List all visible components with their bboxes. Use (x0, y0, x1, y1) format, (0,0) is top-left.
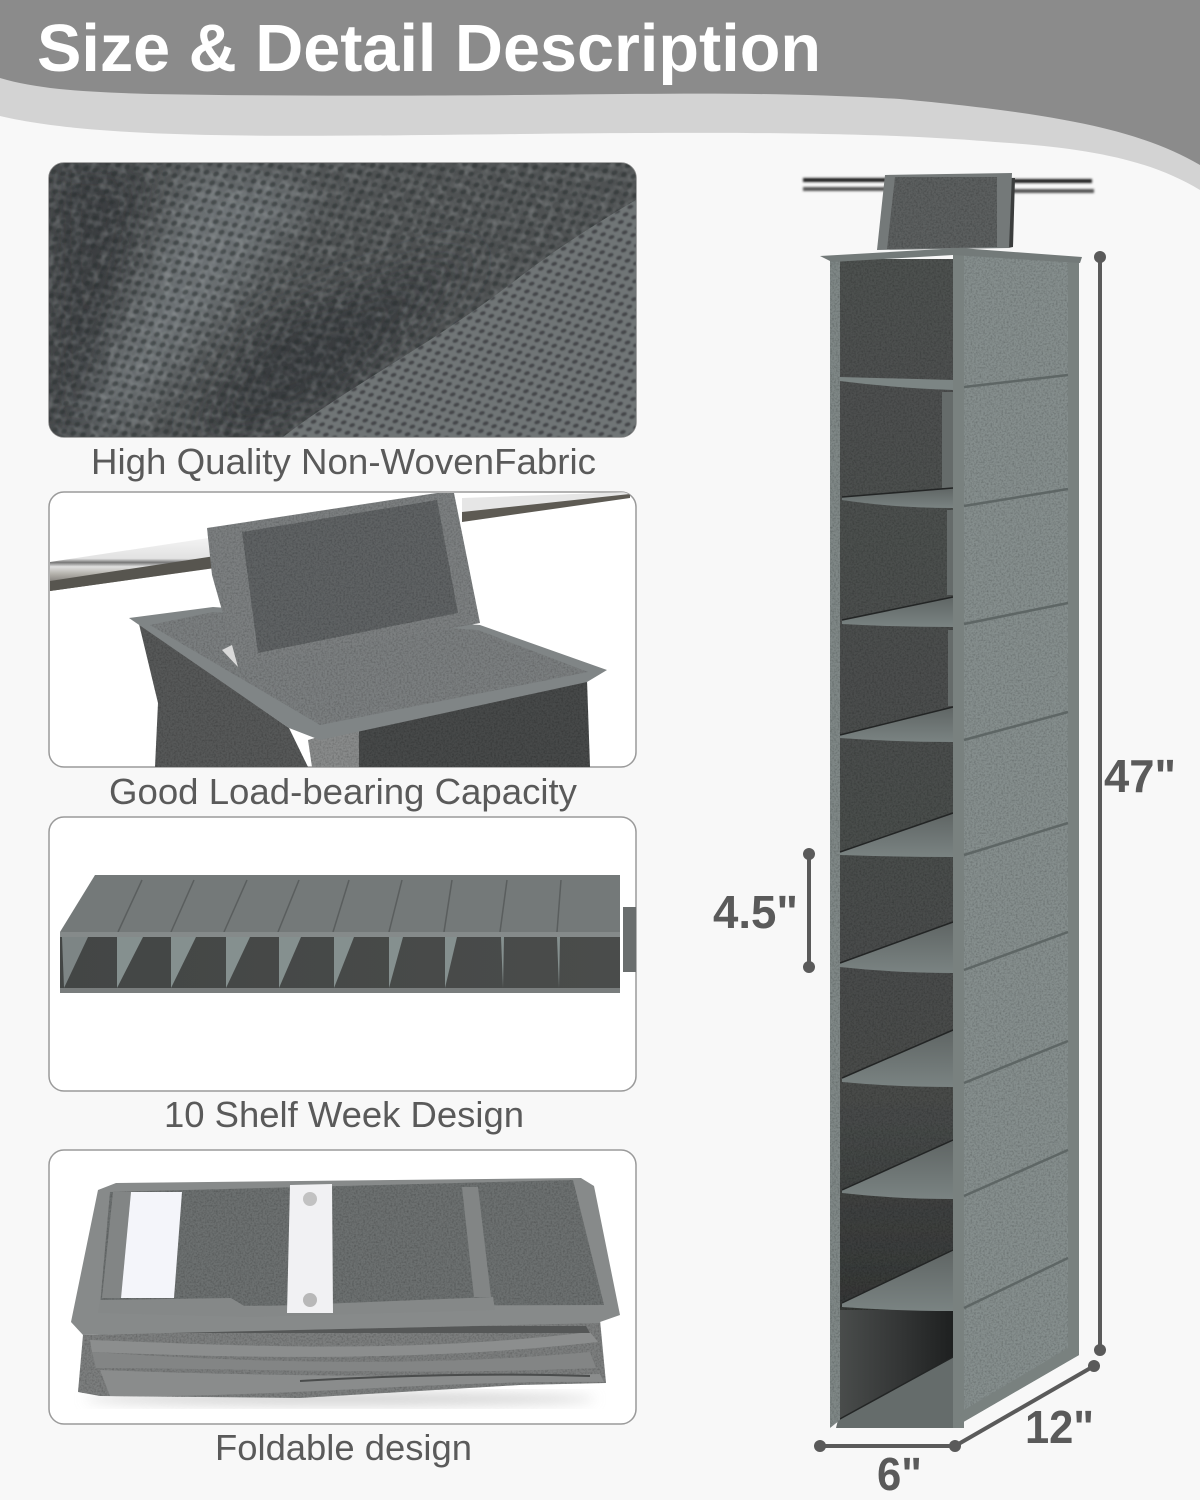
dimension: depth 12: 12" (1025, 1401, 1094, 1453)
top face dividers (118, 880, 561, 932)
caption: foldable: Foldable design (215, 1427, 472, 1468)
top face (60, 875, 620, 932)
icon: white strip with snaps (287, 1184, 333, 1313)
hanger strap (877, 173, 1015, 250)
left front strip (830, 260, 840, 1428)
strap loop (207, 493, 480, 628)
fabric inner (100, 1180, 604, 1306)
header band (0, 0, 1200, 190)
caption: load-bearing: Good Load-bearing Capacity (109, 771, 577, 812)
dimension: shelf height 4.5 (713, 848, 815, 973)
dimension: depth 12 (955, 1360, 1100, 1453)
dimension: height 47: 47" (1104, 750, 1176, 802)
panel: fabric close-up (49, 163, 636, 437)
panel: folded organizer (49, 1150, 636, 1424)
left hanging body (139, 624, 308, 767)
dimension: width 6: 6" (877, 1448, 922, 1500)
shelf back shadow lines (838, 488, 953, 1420)
title: Size & Detail Description (37, 11, 821, 86)
panel: 10 shelf flat view (49, 817, 636, 1091)
ground shadow (85, 1393, 595, 1405)
left strip (102, 1192, 131, 1298)
lit inner edges (942, 392, 953, 706)
dimension: width 6 (814, 1440, 961, 1500)
right hanging body (359, 680, 590, 767)
panel: hanger and load-bearing photo (49, 492, 636, 767)
top face (71, 1178, 620, 1335)
bottom strip (98, 1297, 495, 1317)
middle strip (462, 1187, 491, 1297)
folded layers (78, 1320, 606, 1398)
icon: metal rod (50, 492, 630, 591)
back wall of compartments (840, 259, 953, 1311)
side panel shelf lines (964, 375, 1068, 1308)
dimension: height 47 (1094, 251, 1176, 1356)
side panel stitched strips (953, 254, 1079, 1428)
front opening (60, 932, 620, 993)
dimension: shelf height 4.5: 4.5" (713, 886, 798, 938)
top plate (820, 248, 1082, 263)
shelves (836, 377, 953, 1428)
top plate (129, 607, 607, 740)
side panel (953, 254, 1079, 1428)
bottom compartment wall (838, 1310, 953, 1428)
icon: white label strip (121, 1192, 182, 1298)
hanging rod (803, 180, 1094, 191)
caption: 10 shelf: 10 Shelf Week Design (164, 1094, 524, 1135)
side tab (623, 907, 636, 972)
hanging organizer product (803, 173, 1094, 1428)
caption: fabric: High Quality Non-WovenFabric (91, 441, 596, 482)
